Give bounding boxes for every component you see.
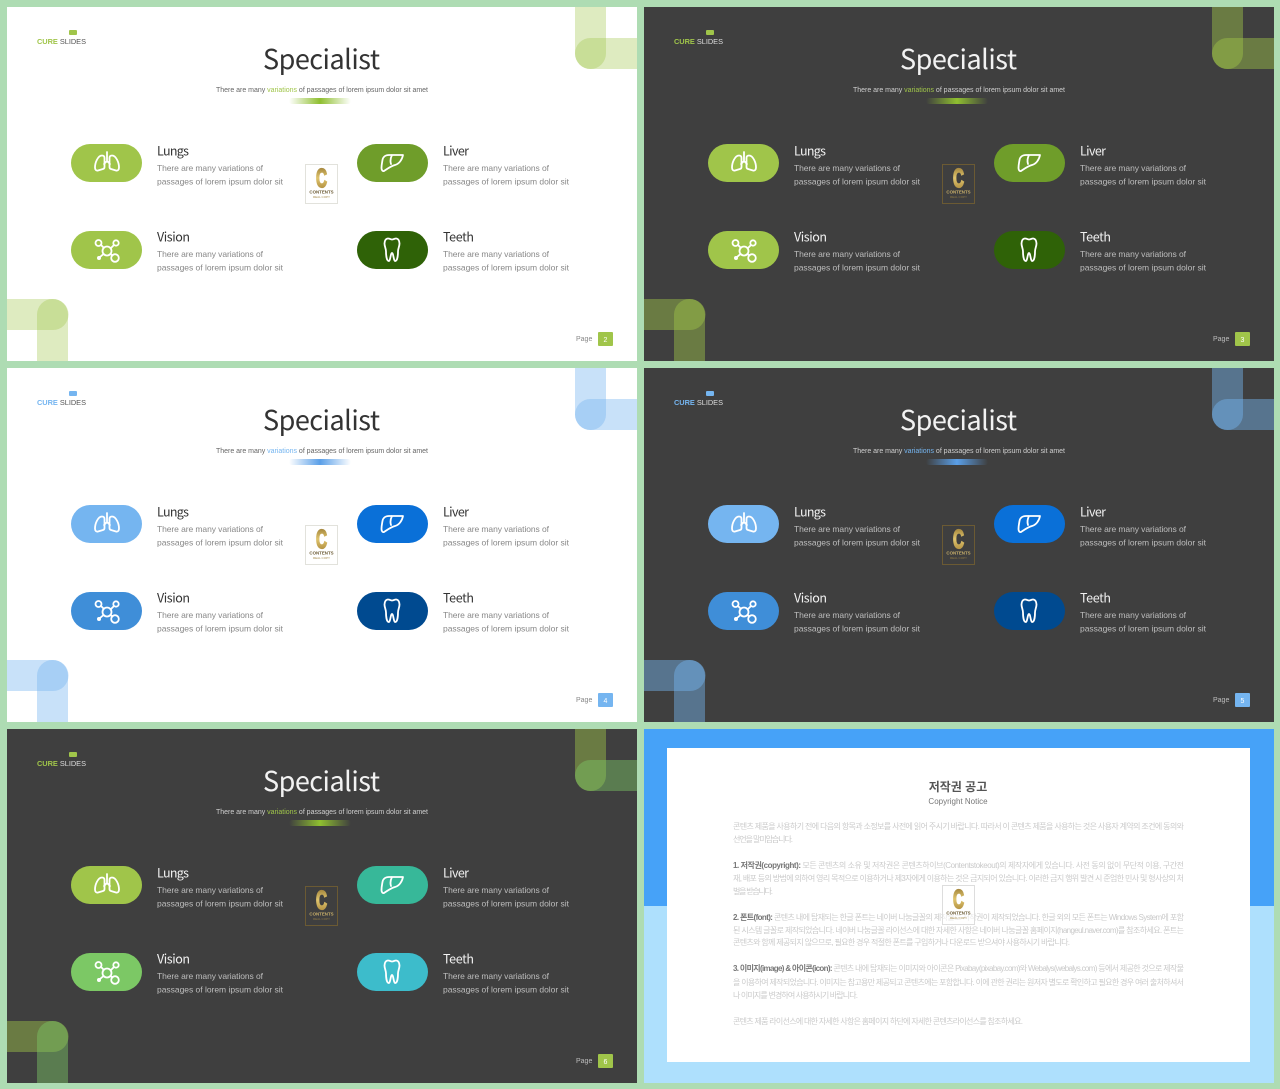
- item: lungs: passages of lorem ipsum dolor sit: [157, 538, 284, 548]
- item: vision: Vision: [794, 588, 827, 606]
- item: lungs: Lungs: [794, 140, 826, 160]
- title: Specialist: [900, 399, 1017, 438]
- item: vision: passages of lorem ipsum dolor sit: [157, 624, 284, 634]
- item: lungs: [708, 502, 921, 548]
- item: lungs: Lungs: [794, 502, 826, 520]
- corner shape: top right: [575, 7, 637, 69]
- item: vision: Vision: [157, 226, 190, 246]
- title: Specialist: [263, 760, 380, 799]
- watermark logo: C: [316, 885, 327, 915]
- corner shape: bottom left: [7, 299, 68, 361]
- page number: [1213, 693, 1250, 707]
- logo: [37, 752, 86, 768]
- gradient underline: [289, 820, 351, 826]
- copyright body text: 콘텐츠와 함께 제공되지 않으므로, 필요한 경우 적절한 폰트를 구입하거나 다운로드 받으셔야 사용하시기 바랍니다.: [733, 937, 1070, 947]
- item: liver: [994, 502, 1207, 548]
- item: liver: passages of lorem ipsum dolor sit: [1080, 538, 1207, 548]
- item: liver: Liver: [443, 140, 469, 160]
- item: teeth: passages of lorem ipsum dolor sit: [1080, 262, 1207, 272]
- item: liver: Liver: [443, 862, 469, 882]
- item: teeth: passages of lorem ipsum dolor sit: [1080, 624, 1207, 634]
- watermark logo: [942, 163, 974, 204]
- watermark logo: REAL COPY: [313, 917, 330, 921]
- title: Specialist: [263, 399, 380, 438]
- copyright body text: 콘텐츠 제품 라이선스에 대한 자세한 사항은 홈페이지 하단에 자세한 콘텐츠라이선스를 참조하세요.: [733, 1016, 1023, 1026]
- item: liver: There are many variations of: [443, 885, 550, 895]
- subtitle: There are many variations of passages of lorem ipsum dolor sit amet: [216, 448, 428, 455]
- item: lungs: [71, 502, 284, 548]
- watermark logo: CONTENTS: [309, 190, 334, 194]
- copyright body text: 된 시스템 글꼴로 제작되었습니다. 네이버 나눔글꼴 라이선스에 대한 자세한 사항은 네이버 나눔글꼴 홈페이지(hangeul.naver.com)를 참조하세요. 폰트는: [733, 925, 1184, 935]
- watermark logo: [306, 524, 338, 564]
- gradient underline: [289, 459, 351, 465]
- watermark logo: REAL COPY: [313, 556, 330, 560]
- item: vision: There are many variations of: [794, 610, 901, 620]
- logo: CURE SLIDES: [37, 759, 86, 768]
- watermark logo: CONTENTS: [309, 550, 334, 556]
- item: lungs: There are many variations of: [794, 524, 901, 534]
- copyright body text: 선언을 말미암습니다.: [733, 834, 793, 844]
- item: vision: There are many variations of: [794, 249, 901, 259]
- watermark logo: CONTENTS: [946, 190, 971, 194]
- item: teeth: Teeth: [1080, 588, 1111, 606]
- item: teeth: There are many variations of: [443, 610, 550, 620]
- item: lungs: Lungs: [157, 502, 189, 520]
- corner shape: top right: [1212, 368, 1274, 430]
- item: lungs: passages of lorem ipsum dolor sit: [157, 176, 284, 186]
- copyright heading: 저작권 공고: [929, 779, 987, 794]
- watermark logo: [306, 163, 338, 204]
- item: vision: [71, 588, 284, 634]
- item: teeth: Teeth: [443, 588, 474, 606]
- page number: 4: [604, 698, 608, 705]
- corner shape: bottom left: [7, 1021, 68, 1083]
- item: liver: passages of lorem ipsum dolor sit: [443, 898, 570, 908]
- item: vision: passages of lorem ipsum dolor sit: [157, 262, 284, 272]
- item: liver: passages of lorem ipsum dolor sit: [443, 176, 570, 186]
- page number: 6: [604, 1059, 608, 1066]
- item: lungs: [708, 140, 921, 186]
- item: lungs: Lungs: [157, 140, 189, 160]
- item: lungs: [71, 862, 284, 908]
- title: Specialist: [900, 38, 1017, 77]
- copyright body text: 재, 배포 등의 방법에 의하여 영리 목적으로 이용하거나 제3자에게 이용하는 것은 금지되어 있습니다. 이러한 금지 행위 발견 시 준엄한 민사 및 형사상의 처: [733, 873, 1184, 883]
- page number: Page: [576, 1058, 592, 1065]
- item: vision: passages of lorem ipsum dolor sit: [794, 262, 921, 272]
- item: teeth: passages of lorem ipsum dolor sit: [443, 262, 570, 272]
- watermark logo: REAL COPY: [950, 916, 967, 920]
- copyright body text: 벌을 받습니다.: [733, 886, 773, 896]
- panel: dark mixed green slide: [7, 729, 637, 1083]
- panel: light blue slide: [7, 368, 637, 722]
- item: vision: Vision: [157, 588, 190, 606]
- copyright body text: 1. 저작권(copyright): 모든 콘텐츠의 소유 및 저작권은 콘텐츠하이브(Contentstokeout)의 제작자에게 있습니다. 사전 동의 없이 무단적 이용, 구간전: [733, 860, 1184, 870]
- item: teeth: [994, 226, 1207, 272]
- item: teeth: There are many variations of: [1080, 249, 1187, 259]
- item: lungs: passages of lorem ipsum dolor sit: [157, 898, 284, 908]
- item: vision: Vision: [157, 948, 190, 968]
- watermark logo: [942, 524, 974, 564]
- copyright body text: 3. 이미지(image) & 아이콘(icon): 콘텐츠 내에 탑재되는 이미지와 아이콘은 Pixabay(pixabay.com)와 Webalys(webalys.com) 등에서 제공한 것으로 제작물: [733, 963, 1184, 973]
- page number: Page: [1213, 336, 1229, 343]
- corner shape: top right: [575, 729, 637, 791]
- item: lungs: passages of lorem ipsum dolor sit: [794, 176, 921, 186]
- subtitle: There are many variations of passages of lorem ipsum dolor sit amet: [216, 809, 428, 816]
- item: teeth: [994, 588, 1207, 634]
- item: liver: There are many variations of: [443, 163, 550, 173]
- item: liver: Liver: [1080, 502, 1106, 520]
- item: teeth: [357, 948, 570, 994]
- item: vision: [708, 588, 921, 634]
- logo: [37, 30, 86, 46]
- watermark logo: [306, 885, 338, 926]
- corner shape: bottom left: [644, 299, 706, 361]
- watermark logo: [942, 884, 974, 924]
- item: liver: [357, 140, 570, 186]
- page number: 5: [1241, 698, 1245, 705]
- page number: 3: [1241, 337, 1245, 344]
- item: lungs: Lungs: [157, 862, 189, 882]
- item: liver: There are many variations of: [1080, 163, 1187, 173]
- item: vision: There are many variations of: [157, 610, 264, 620]
- panel: copyright notice: [644, 729, 1274, 1083]
- gradient underline: [926, 459, 988, 465]
- page number: Page: [1213, 697, 1229, 704]
- item: vision: passages of lorem ipsum dolor sit: [157, 984, 284, 994]
- item: lungs: There are many variations of: [794, 163, 901, 173]
- watermark logo: C: [953, 884, 964, 914]
- page number: 2: [604, 337, 608, 344]
- watermark logo: REAL COPY: [950, 195, 967, 199]
- item: teeth: passages of lorem ipsum dolor sit: [443, 984, 570, 994]
- copyright body text: 나 이미지를 변경하여 사용하시기 바랍니다.: [733, 990, 858, 1000]
- panel: dark green slide: [644, 7, 1274, 361]
- copyright body text: 콘텐츠 제품을 사용하기 전에 다음의 항목과 소정보를 사전에 읽어 주시기 바랍니다. 따라서 이 콘텐츠 제품을 사용하는 것은 사용자 계약의 조건에 동의와: [733, 821, 1185, 831]
- item: vision: passages of lorem ipsum dolor sit: [794, 624, 921, 634]
- title: Specialist: [263, 38, 380, 77]
- watermark logo: CONTENTS: [309, 912, 334, 916]
- logo: CURE SLIDES: [674, 37, 723, 46]
- page number: [1213, 332, 1250, 346]
- logo: [37, 391, 86, 407]
- item: liver: passages of lorem ipsum dolor sit: [1080, 176, 1207, 186]
- item: liver: [994, 140, 1207, 186]
- item: liver: Liver: [1080, 140, 1106, 160]
- item: teeth: There are many variations of: [443, 971, 550, 981]
- item: vision: [71, 226, 284, 272]
- item: liver: [357, 862, 570, 908]
- item: teeth: Teeth: [1080, 226, 1111, 246]
- item: lungs: passages of lorem ipsum dolor sit: [794, 538, 921, 548]
- item: vision: There are many variations of: [157, 971, 264, 981]
- watermark logo: REAL COPY: [313, 195, 330, 199]
- watermark logo: REAL COPY: [950, 556, 967, 560]
- item: vision: There are many variations of: [157, 249, 264, 259]
- item: teeth: [357, 226, 570, 272]
- panel: dark blue slide: [644, 368, 1274, 722]
- item: teeth: Teeth: [443, 948, 474, 968]
- gradient underline: [926, 98, 988, 104]
- watermark logo: C: [953, 163, 964, 193]
- item: teeth: There are many variations of: [443, 249, 550, 259]
- item: vision: [708, 226, 921, 272]
- subtitle: There are many variations of passages of lorem ipsum dolor sit amet: [853, 87, 1065, 94]
- item: vision: [71, 948, 284, 994]
- corner shape: top right: [575, 368, 637, 430]
- copyright body text: 2. 폰트(font): 콘텐츠 내에 탑재되는 한글 폰트는 네이버 나눔글꼴의 제작물로 저작권이 제작되었습니다. 한글 외의 모든 폰트는 Windows System에 포함: [733, 912, 1185, 922]
- watermark logo: CONTENTS: [946, 910, 971, 916]
- item: lungs: There are many variations of: [157, 524, 264, 534]
- logo: [674, 391, 723, 407]
- logo: CURE SLIDES: [37, 37, 86, 46]
- item: liver: There are many variations of: [443, 524, 550, 534]
- corner shape: bottom left: [7, 660, 68, 722]
- logo: [674, 30, 723, 46]
- watermark logo: C: [953, 524, 964, 554]
- item: lungs: There are many variations of: [157, 885, 264, 895]
- watermark logo: CONTENTS: [946, 550, 971, 556]
- page number: [576, 693, 613, 707]
- page number: Page: [576, 336, 592, 343]
- item: teeth: passages of lorem ipsum dolor sit: [443, 624, 570, 634]
- gradient underline: [289, 98, 351, 104]
- copyright body text: 을 이용하여 제작되었습니다. 이미지는 참고용만 제공되고 콘텐츠에는 포함합니다. 이에 관한 권리는 원저자 별도로 확인하고 필요한 경우 여러 출처하셔서: [733, 977, 1184, 987]
- logo: CURE SLIDES: [37, 398, 86, 407]
- subtitle: There are many variations of passages of lorem ipsum dolor sit amet: [853, 448, 1065, 455]
- subtitle: There are many variations of passages of lorem ipsum dolor sit amet: [216, 87, 428, 94]
- page number: [576, 1054, 613, 1068]
- item: liver: passages of lorem ipsum dolor sit: [443, 538, 570, 548]
- item: vision: Vision: [794, 226, 827, 246]
- item: liver: Liver: [443, 502, 469, 520]
- item: liver: [357, 502, 570, 548]
- copyright subheading: Copyright Notice: [928, 797, 988, 806]
- panel: light green slide: [7, 7, 637, 361]
- logo: CURE SLIDES: [674, 398, 723, 407]
- page number: [576, 332, 613, 346]
- item: lungs: [71, 140, 284, 186]
- item: liver: There are many variations of: [1080, 524, 1187, 534]
- watermark logo: C: [316, 163, 327, 193]
- item: teeth: Teeth: [443, 226, 474, 246]
- watermark logo: C: [316, 524, 327, 554]
- copyright body text: [733, 821, 1185, 1026]
- corner shape: top right: [1212, 7, 1274, 69]
- corner shape: bottom left: [644, 660, 706, 722]
- page number: Page: [576, 697, 592, 704]
- item: teeth: There are many variations of: [1080, 610, 1187, 620]
- item: teeth: [357, 588, 570, 634]
- item: lungs: There are many variations of: [157, 163, 264, 173]
